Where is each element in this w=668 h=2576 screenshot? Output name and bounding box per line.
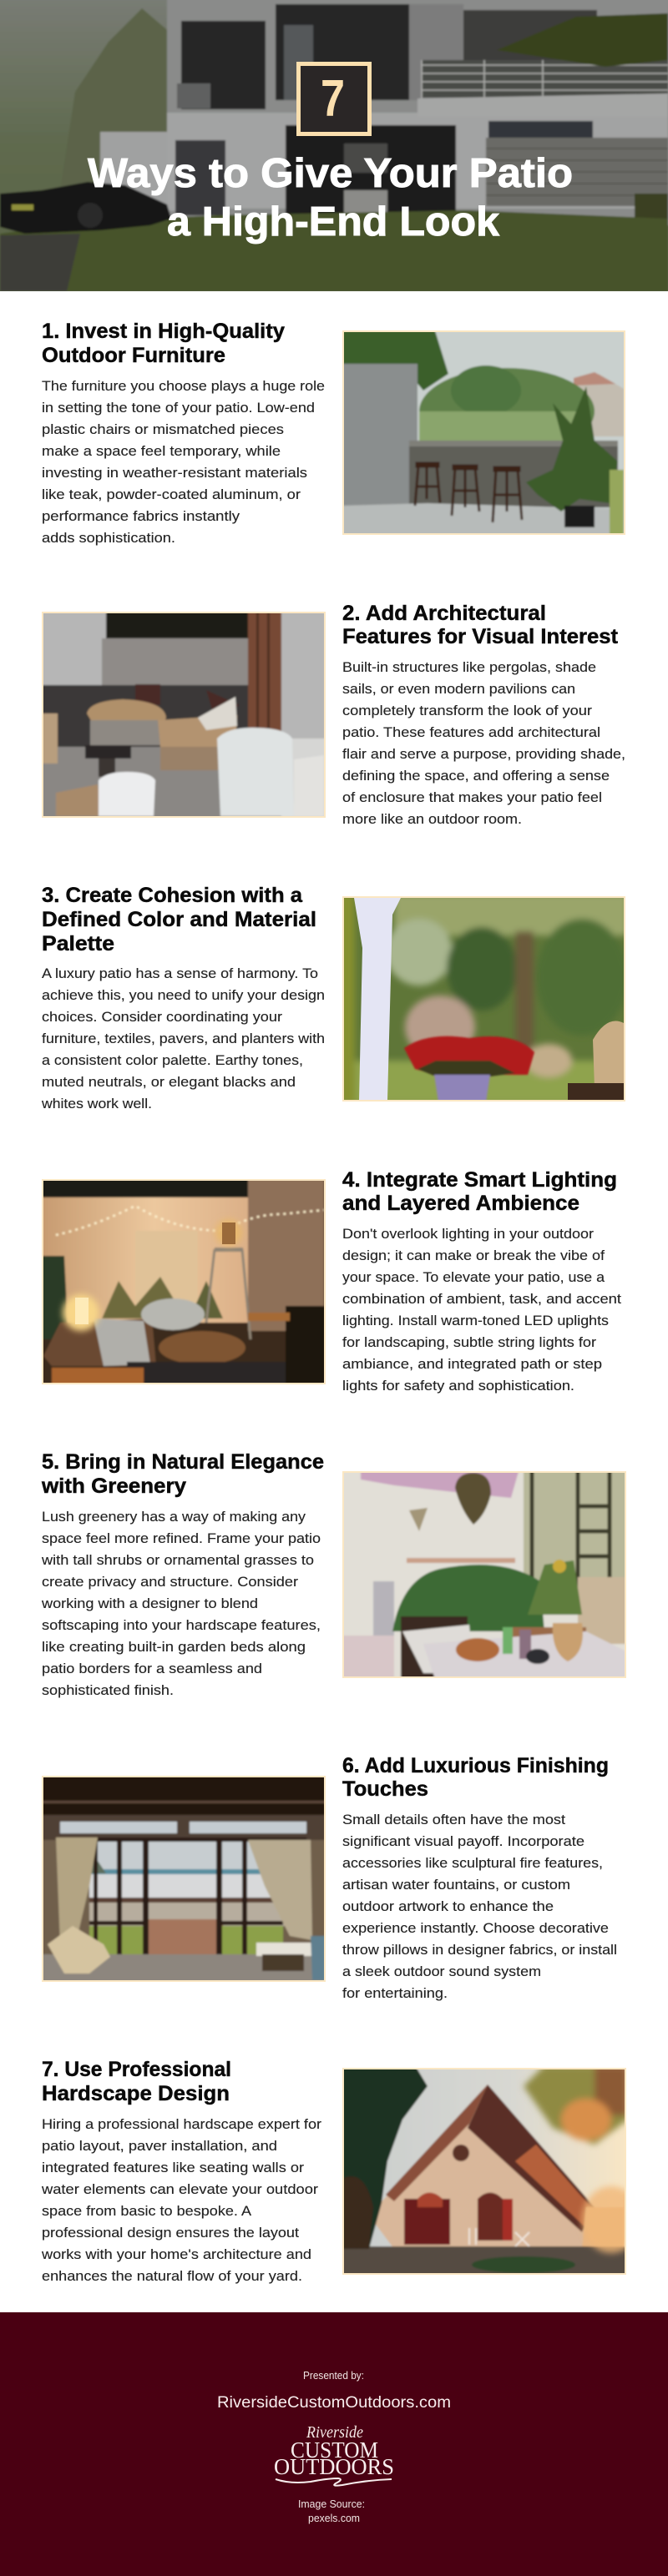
heading 7: 7. Use Professional — [42, 2058, 231, 2081]
heading 1: Outdoor Furniture — [42, 344, 225, 367]
heading 2 — [342, 602, 619, 648]
body text 1: plastic chairs or mismatched pieces — [42, 422, 284, 437]
body text 4: Don't overlook lighting in your outdoor — [342, 1227, 595, 1242]
body text 5: space feel more refined. Frame your patio — [42, 1531, 321, 1546]
body text 5: like creating built-in garden beds along — [42, 1640, 306, 1655]
badge: number 7 — [299, 63, 369, 134]
body text 4: combination of ambient, task, and accent — [342, 1292, 621, 1307]
hero banner — [0, 0, 668, 296]
body text 3: whites work well. — [41, 1096, 152, 1112]
image source credit: Image Source: — [298, 2498, 365, 2510]
presented by label: Presented by: — [303, 2370, 364, 2382]
body text 2 — [342, 660, 625, 827]
body text 2: patio. These features add architectural — [342, 725, 600, 740]
body text 5: patio borders for a seamless and — [42, 1661, 262, 1676]
body text 4: for landscaping, subtle string lights for — [342, 1335, 597, 1350]
heading 3 — [42, 884, 316, 955]
body text 1: performance fabrics instantly — [42, 509, 240, 524]
title — [88, 151, 573, 244]
body text 5: sophisticated finish. — [42, 1683, 174, 1698]
body text 5: working with a designer to blend — [41, 1596, 258, 1611]
body text 4 — [342, 1227, 621, 1394]
heading 2: Features for Visual Interest — [342, 625, 619, 648]
section 5: greenery — [41, 1450, 629, 1698]
body text 6: throw pillows in designer fabrics, or install — [342, 1943, 617, 1958]
body text 6 — [342, 1812, 617, 2001]
body text 4: lighting. Install warm-toned LED uplights — [342, 1313, 609, 1328]
website url: RiversideCustomOutdoors.com — [217, 2393, 451, 2412]
section 4: lighting — [39, 1168, 621, 1394]
body text 1 — [42, 379, 325, 546]
body text 1: adds sophistication. — [42, 531, 175, 546]
hero photo: modern house with lawn — [0, 0, 668, 291]
body text 6: accessories like sculptural fire features, — [342, 1856, 603, 1871]
photo 1: concrete bar with stools — [340, 328, 628, 537]
section 7: professional hardscape design — [41, 2058, 640, 2284]
heading 1: 1. Invest in High-Quality — [42, 320, 285, 343]
photo 6: living room opening to sea view — [39, 1773, 328, 1984]
section 3: color and material palette — [41, 884, 628, 1112]
body text 6: outdoor artwork to enhance the — [342, 1899, 554, 1914]
body text 2: more like an outdoor room. — [342, 812, 522, 827]
heading 5: with Greenery — [41, 1475, 186, 1498]
photo 3: garden with red flowers — [340, 894, 628, 1104]
heading 2: 2. Add Architectural — [342, 602, 546, 625]
body text 6: artisan water fountains, or custom — [342, 1878, 570, 1893]
body text 7: Hiring a professional hardscape expert for — [42, 2117, 322, 2132]
title: Ways to Give Your Patio — [88, 151, 573, 196]
title: a High-End Look — [167, 199, 500, 244]
heading 6: 6. Add Luxurious Finishing — [342, 1754, 609, 1777]
logo: Riverside Custom Outdoors: Riverside — [306, 2423, 363, 2442]
body text 3: muted neutrals, or elegant blacks and — [42, 1075, 296, 1090]
body text 5: softscaping into your hardscape features, — [42, 1618, 321, 1633]
heading 5: 5. Bring in Natural Elegance — [42, 1450, 324, 1474]
body text 4: lights for safety and sophistication. — [342, 1379, 574, 1394]
body text 1: in setting the tone of your patio. Low-end — [42, 401, 315, 416]
body text 7: works with your home's architecture and — [41, 2247, 311, 2262]
heading 4 — [342, 1168, 617, 1215]
body text 7: patio layout, paver installation, and — [42, 2139, 277, 2154]
body text 4: ambiance, and integrated path or step — [342, 1357, 602, 1372]
heading 7 — [42, 2058, 231, 2105]
section 2: architectural features — [39, 602, 625, 827]
heading 6: Touches — [342, 1777, 428, 1801]
body text 7: enhances the natural flow of your yard. — [42, 2269, 302, 2284]
body text 4: design; it can make or break the vibe of — [342, 1248, 605, 1263]
body text 7: space from basic to bespoke. A — [42, 2204, 251, 2219]
logo: Riverside Custom Outdoors: OUTDOORS — [274, 2454, 394, 2479]
photo 7: a-frame house at sunset — [340, 2065, 640, 2277]
body text 2: sails, or even modern pavilions can — [342, 682, 575, 697]
logo: Riverside Custom Outdoors: CUSTOM — [291, 2437, 378, 2463]
body text 7: professional design ensures the layout — [42, 2226, 299, 2241]
body text 5: with tall shrubs or ornamental grasses to — [41, 1553, 314, 1568]
body text 1: The furniture you choose plays a huge role — [42, 379, 325, 394]
body text 1: investing in weather-resistant materials — [42, 466, 307, 481]
heading 3: 3. Create Cohesion with a — [42, 884, 303, 907]
heading 5 — [41, 1450, 324, 1498]
body text 7: water elements can elevate your outdoor — [41, 2182, 319, 2197]
body text 1: make a space feel temporary, while — [42, 444, 281, 459]
body text 6: significant visual payoff. Incorporate — [342, 1834, 584, 1849]
logo: Riverside Custom Outdoors — [274, 2423, 394, 2486]
body text 6: experience instantly. Choose decorative — [342, 1921, 609, 1936]
photo 4: string lights and lanterns — [39, 1177, 328, 1389]
section 6: finishing touches — [39, 1754, 617, 2001]
badge: number 7: 7 — [321, 70, 345, 128]
body text 5: Lush greenery has a way of making any — [42, 1510, 306, 1525]
section 1: furniture — [42, 320, 628, 546]
body text 3: a consistent color palette. Earthy tones, — [42, 1053, 303, 1068]
image source credit — [298, 2498, 365, 2524]
body text 7 — [41, 2117, 322, 2284]
body text 3: achieve this, you need to unify your design — [42, 988, 325, 1003]
body text 3: A luxury patio has a sense of harmony. To — [42, 966, 318, 981]
body text 6: for entertaining. — [342, 1986, 448, 2001]
body text 3: choices. Consider coordinating your — [42, 1010, 283, 1025]
heading 3: Palette — [42, 932, 114, 955]
body text 6: Small details often have the most — [342, 1812, 565, 1827]
body text 7: integrated features like seating walls or — [42, 2160, 305, 2175]
footer panel — [0, 2312, 668, 2576]
photo 5: terrace table with flowers — [340, 1469, 629, 1681]
heading 3: Defined Color and Material — [42, 908, 316, 931]
body text 2: of enclosure that makes your patio feel — [342, 790, 602, 805]
heading 4: 4. Integrate Smart Lighting — [342, 1168, 617, 1192]
heading 6 — [342, 1754, 609, 1801]
body text 2: Built-in structures like pergolas, shade — [342, 660, 596, 675]
body text 5: create privacy and structure. Consider — [42, 1575, 299, 1590]
body text 3 — [41, 966, 325, 1112]
heading 1 — [42, 320, 285, 367]
body text 2: defining the space, and offering a sense — [342, 769, 610, 784]
heading 7: Hardscape Design — [42, 2082, 230, 2105]
body text 2: completely transform the look of your — [342, 703, 593, 718]
image source credit: pexels.com — [308, 2513, 360, 2524]
body text 3: furniture, textiles, pavers, and planters with — [42, 1031, 325, 1046]
body text 6: a sleek outdoor sound system — [342, 1964, 541, 1979]
body text 1: like teak, powder-coated aluminum, or — [42, 487, 301, 502]
photo 2: rattan chairs and white planters — [39, 609, 328, 822]
body text 2: flair and serve a purpose, providing shade, — [342, 747, 625, 762]
body text 5 — [41, 1510, 321, 1698]
heading 4: and Layered Ambience — [342, 1192, 579, 1215]
body text 4: your space. To elevate your patio, use a — [342, 1270, 605, 1285]
